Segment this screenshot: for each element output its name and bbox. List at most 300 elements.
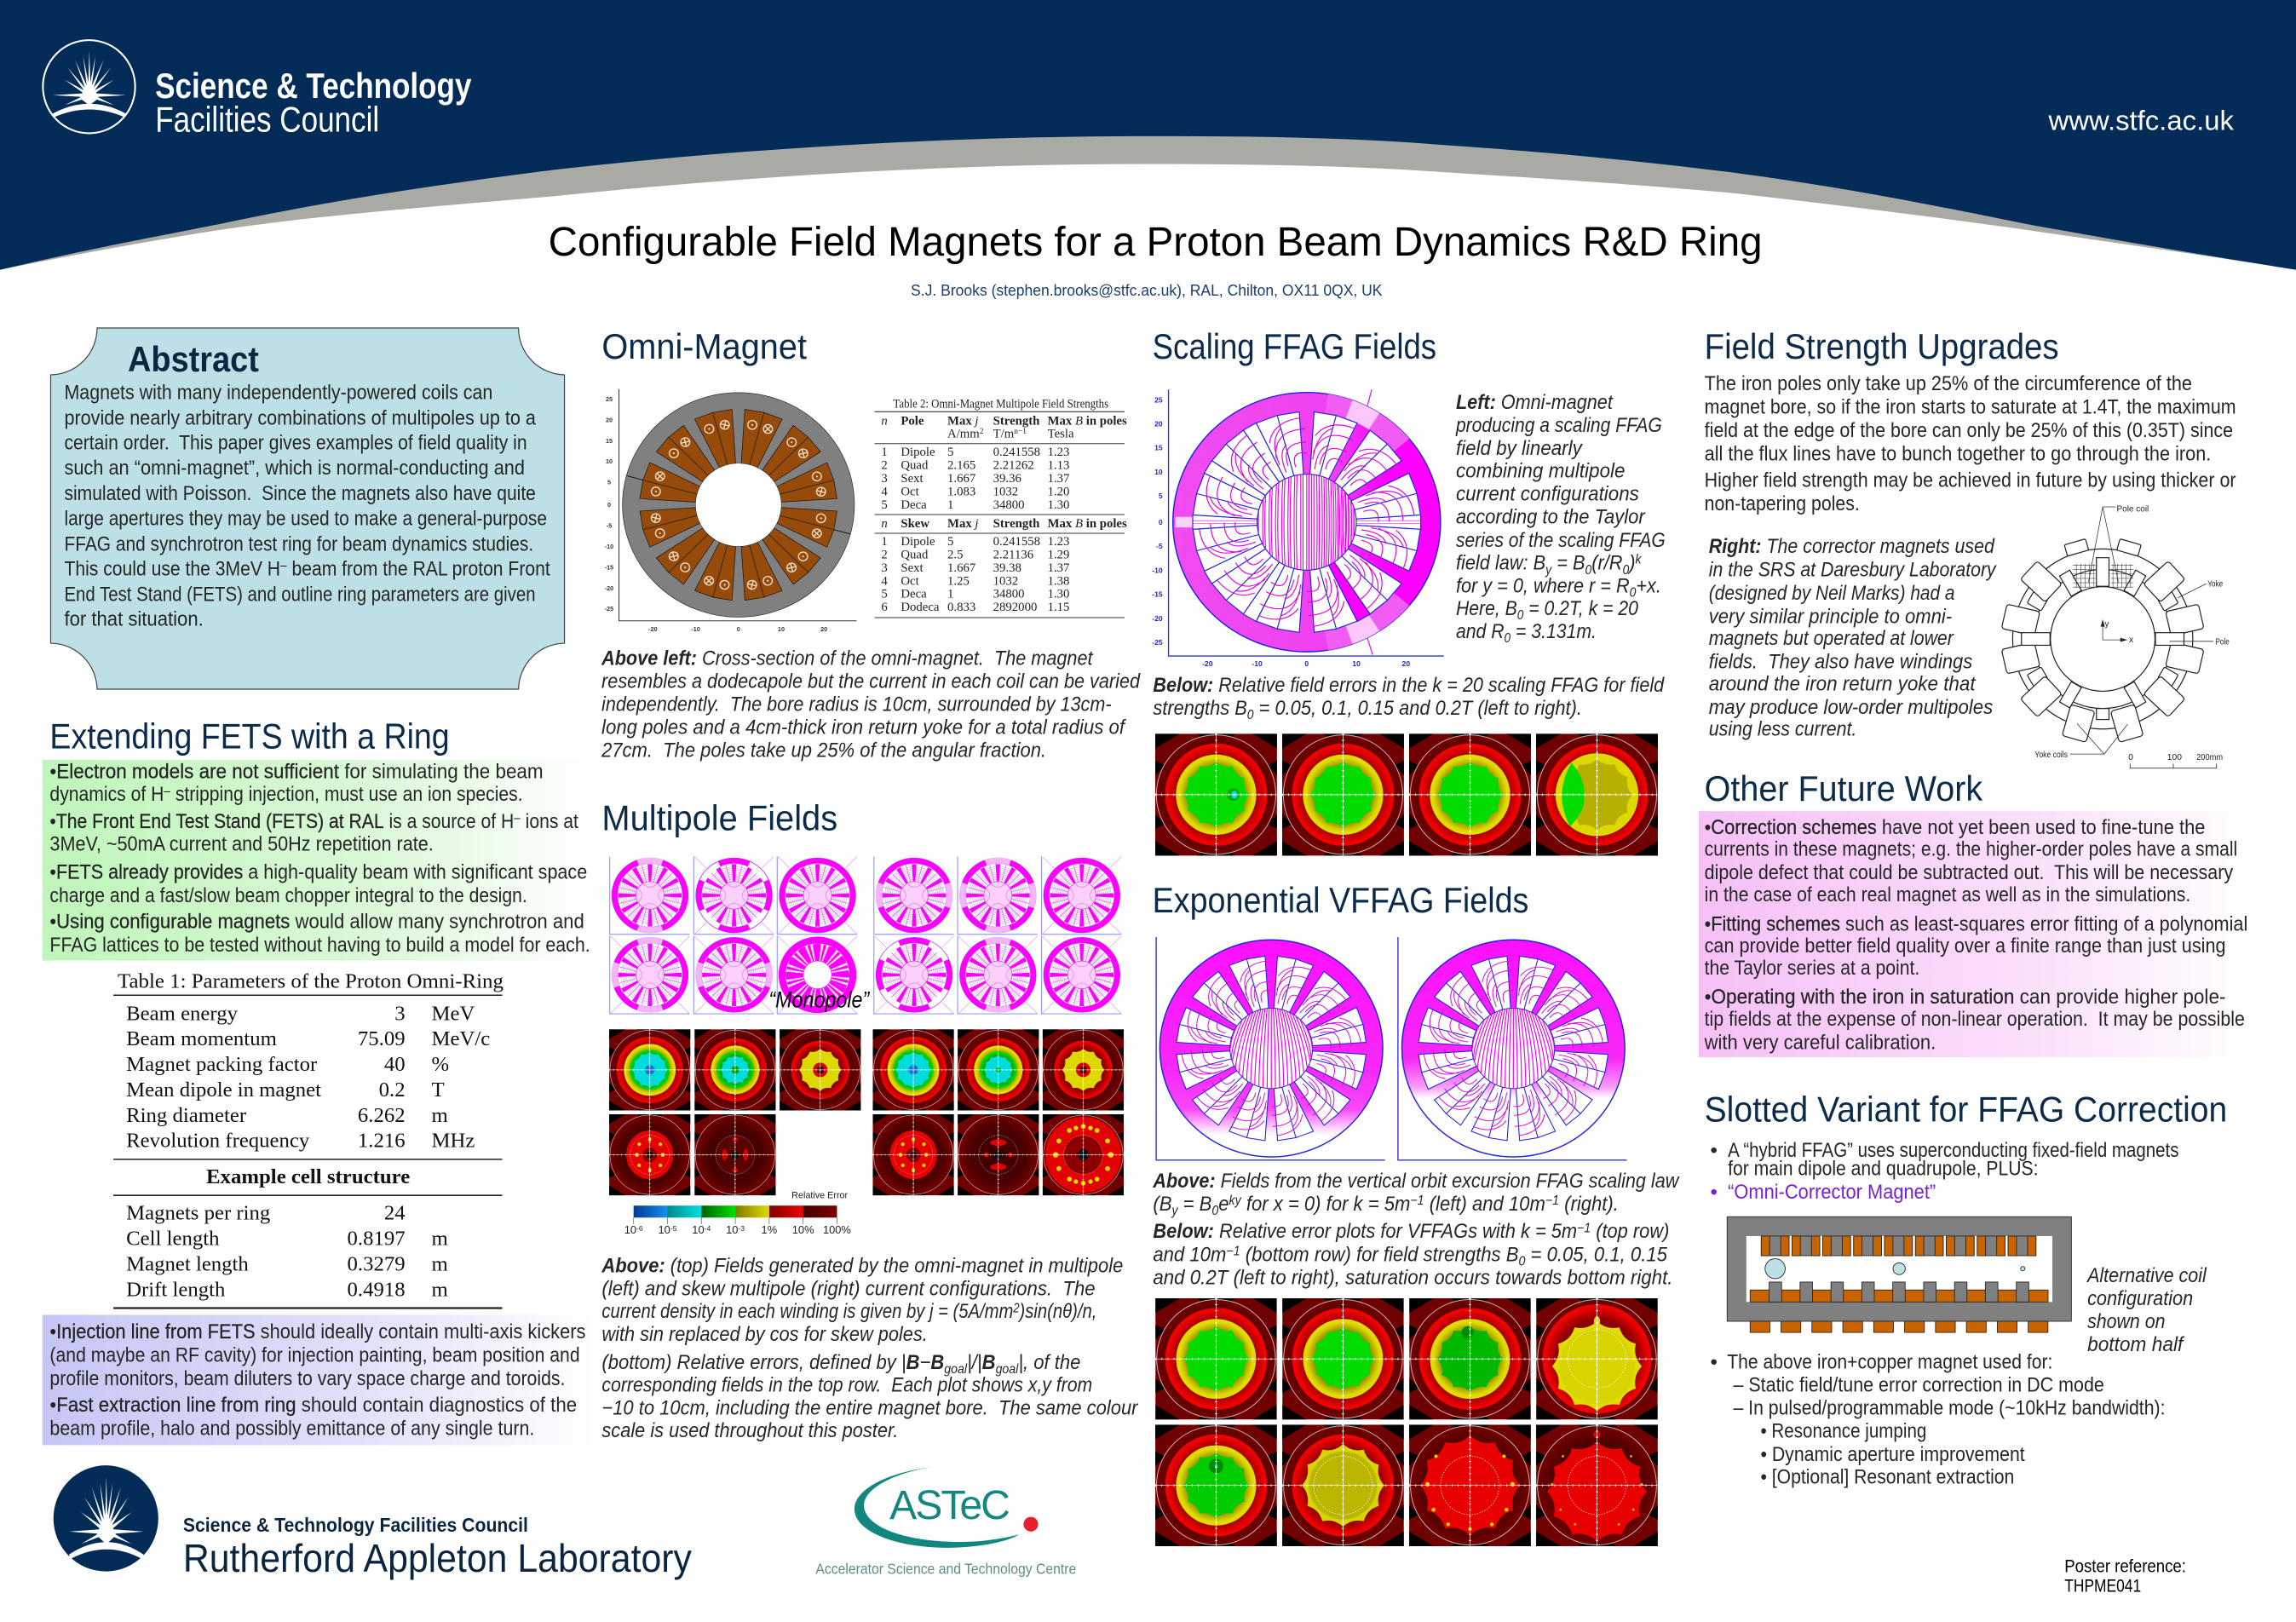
caption: right: in the SRS at Daresbury Laboratory: [1709, 558, 1997, 581]
table 2: multipole field strengths: 39.38: [993, 561, 1021, 575]
caption: left: combining multipole: [1456, 460, 1625, 483]
pink callout: can provide better field quality over a finite range than just using: [1705, 935, 2225, 958]
website url: www.stfc.ac.uk: [2048, 105, 2235, 136]
table 1: ring parameters: Table 1: Parameters of the Proton Omni-Ring: [118, 969, 504, 992]
caption: left: according to the Taylor: [1456, 506, 1646, 529]
table 2: multipole field strengths: [875, 398, 1127, 618]
caption: left: ): [1627, 552, 1636, 575]
table 2: multipole field strengths: Strength: [993, 414, 1039, 428]
table 2: multipole field strengths: Deca: [901, 588, 927, 601]
legend: relative error colour scale: 10: [726, 1223, 738, 1236]
panel: scaling FFAG fields: [1152, 327, 1666, 855]
green callout: dynamics of H: [49, 783, 180, 806]
table 2: multipole field strengths: Deca: [901, 498, 927, 512]
caption: alternative coil: shown on: [2087, 1310, 2166, 1333]
table 2: multipole field strengths: Oct: [901, 574, 920, 588]
heading: abstract: Abstract: [128, 340, 259, 379]
table 2: multipole field strengths: Pole: [901, 414, 924, 428]
logo text: Science and Technology Facilities Council: Facilities Council: [155, 101, 379, 140]
body text: magnet bore, so if the iron starts to saturate at 1.4T, the maximum: [1705, 396, 2236, 419]
caption: VFFAG fields: (B: [1153, 1193, 1173, 1216]
caption: left: Here, B: [1456, 597, 1525, 620]
pink callout: in the case of each real magnet as well as in the simulations.: [1705, 883, 2190, 906]
pink callout: [1699, 811, 2252, 1057]
chart: scaling FFAG field map: 25: [1154, 395, 1163, 404]
table 2: multipole field strengths: 1.083: [947, 485, 975, 498]
caption: VFFAG fields: Below: Relative error plots for VFFAGs with k = 5m: [1153, 1220, 1614, 1243]
chart: VFFAG field map k=5: [1156, 937, 1385, 1160]
table 1: ring parameters: T: [432, 1078, 445, 1101]
table 2: multipole field strengths: 1: [947, 498, 953, 512]
caption: above left: long poles and a 4cm-thick iron return yoke for a total radius of: [601, 716, 1126, 739]
pink callout: with very careful calibration.: [1704, 1031, 1936, 1054]
table 2: multipole field strengths: 2.21262: [993, 458, 1034, 472]
blue callout: [43, 1314, 593, 1445]
caption: multipole fields: B: [982, 1351, 996, 1374]
chart: scaling FFAG field map: -15: [1152, 590, 1163, 599]
table 1: ring parameters: Beam momentum: [126, 1027, 277, 1050]
table 2: multipole field strengths: 2.5: [947, 549, 963, 562]
grey swoosh: [0, 136, 2296, 279]
caption: VFFAG fields: ky: [1229, 1193, 1242, 1208]
table 2: multipole field strengths: n−1: [1014, 428, 1027, 436]
table 2: multipole field strengths: 34800: [993, 498, 1025, 512]
table 1: ring parameters: 3: [394, 1003, 406, 1026]
table 1: ring parameters: Revolution frequency: [126, 1130, 310, 1153]
blue callout: (and maybe an RF cavity) for injection painting, beam position and: [49, 1343, 580, 1366]
abstract text: large apertures they may be used to make a general-purpose: [64, 508, 547, 531]
table 1: ring parameters: 0.2: [379, 1078, 406, 1101]
chart: scaling FFAG field map: -20: [1152, 614, 1163, 623]
panel: slotted variant for FFAG correction: [1705, 1090, 2227, 1489]
abstract text: FFAG and synchrotron test ring for beam dynamics studies.: [64, 532, 533, 555]
bullet list: uses: • Dynamic aperture improvement: [1760, 1443, 2025, 1466]
abstract text: This could use the 3MeV H: [64, 557, 310, 580]
panel: field strength upgrades: [1705, 327, 2236, 768]
logo: Rutherford Appleton Laboratory: Science & Technology Facilities Council: [183, 1514, 528, 1536]
caption: multipole fields: corresponding fields in the top row. Each plot shows x,y from: [601, 1374, 1092, 1397]
abstract text: for that situation.: [64, 608, 204, 631]
table 2: multipole field strengths: Quad: [901, 549, 929, 562]
legend: relative error colour scale: 1%: [762, 1223, 777, 1236]
label: monopole: “Monopole”: [768, 987, 870, 1013]
table 2: multipole field strengths: n: [881, 517, 888, 531]
caption: above left: [601, 647, 1141, 762]
chart: scaling FFAG field map: 10: [1154, 468, 1163, 476]
caption: right: may produce low-order multipoles: [1709, 696, 1993, 719]
chart: magnet cross-section: 5: [607, 479, 611, 486]
panel: other future work: [1699, 769, 2252, 1057]
caption: alternative coil: bottom half: [2087, 1333, 2184, 1356]
table 1: ring parameters: %: [432, 1053, 449, 1076]
caption: multipole fields: current density in each winding is given by j = (5A/mm: [601, 1300, 1028, 1323]
caption: left: y: [1545, 563, 1552, 578]
abstract text: certain order. This paper gives examples of field quality in: [64, 432, 527, 455]
logo: ASTeC: ASTeC: [889, 1482, 1010, 1528]
bullet list: uses: – In pulsed/programmable mode (~10kHz bandwidth):: [1733, 1397, 2166, 1420]
abstract text: such an “omni-magnet”, which is normal-conducting and: [64, 457, 525, 480]
caption: VFFAG fields: −1: [1226, 1245, 1240, 1259]
caption: multipole fields: [601, 1255, 1138, 1442]
abstract text: provide nearly arbitrary combinations of multipoles up to a: [64, 406, 536, 429]
poster reference: THPME041: [2064, 1575, 2141, 1596]
blue callout: beam profile, halo and possibly emittance of any single turn.: [49, 1417, 534, 1440]
chart: scaling FFAG field map: -10: [1252, 659, 1263, 668]
table 2: multipole field strengths: Dipole: [901, 446, 935, 459]
table 2: multipole field strengths: Skew: [901, 517, 929, 531]
bullet list: for main dipole and quadrupole, PLUS:: [1728, 1157, 2038, 1180]
caption: right: fields. They also have windings: [1709, 651, 1972, 674]
chart: magnet cross-section: 10: [778, 625, 785, 633]
caption: below: = 0.05, 0.1, 0.15 and 0.2T (left to right).: [1254, 697, 1582, 720]
caption: below: strengths B: [1153, 697, 1257, 720]
caption: VFFAG fields: −1: [1545, 1193, 1559, 1208]
table 1: ring parameters: 0.3279: [348, 1253, 406, 1276]
chart: magnet cross-section: 20: [606, 416, 613, 423]
caption: below: 0: [1247, 708, 1254, 722]
logo: ASTeC: [815, 1467, 1076, 1578]
caption: VFFAG fields: 0: [1211, 1204, 1219, 1218]
poster reference: [2064, 1556, 2186, 1596]
bullet list: uses: – Static field/tune error correction in DC mode: [1733, 1373, 2104, 1396]
chart: scaling FFAG field map: [1152, 389, 1444, 668]
table 1: ring parameters: MHz: [432, 1130, 475, 1153]
table 1: ring parameters: m: [432, 1253, 448, 1276]
chart: scaling FFAG field map: 0: [1159, 518, 1163, 526]
table 2: multipole field strengths: Quad: [901, 458, 929, 472]
table 2: multipole field strengths: 4: [881, 485, 888, 498]
legend: relative error colour scale: 10: [659, 1223, 670, 1236]
caption: VFFAG fields: −1: [1410, 1193, 1424, 1208]
chart: magnet cross-section: -20: [648, 625, 658, 633]
table 2: multipole field strengths: T/m: [993, 427, 1014, 440]
diagram: SRS corrector magnet: 100: [2167, 753, 2182, 762]
legend: relative error colour scale: -6: [636, 1224, 643, 1233]
diagram: SRS corrector magnet: x: [2129, 636, 2134, 645]
caption: VFFAG fields: for x = 0) for k = 5m: [1241, 1193, 1410, 1216]
body text: non-tapering poles.: [1705, 492, 1860, 515]
chart grid: multipole relative error maps: [609, 1029, 1124, 1195]
table 2: multipole field strengths: 3: [881, 561, 888, 575]
legend: relative error colour scale: Relative Error: [791, 1191, 848, 1201]
table 1: ring parameters: 75.09: [358, 1027, 406, 1050]
bullet list: uses: The above iron+copper magnet used for:: [1727, 1351, 2052, 1374]
abstract text: beam from the RAL proton Front: [287, 557, 550, 580]
table 2: multipole field strengths: 1.37: [1048, 561, 1069, 575]
caption: left: 0: [1505, 631, 1511, 646]
bullet list: uses: [1711, 1351, 2166, 1489]
green callout: •The Front End Test Stand (FETS) at RAL is a source of H: [49, 810, 532, 833]
heading: Multipole Fields: [601, 799, 837, 838]
table 1: ring parameters: 0.4918: [348, 1279, 406, 1302]
panel: omni-magnet: [601, 327, 1141, 762]
legend: relative error colour scale: 100%: [823, 1223, 851, 1236]
caption: VFFAG fields: [1152, 1170, 1680, 1289]
green callout: –: [164, 784, 170, 798]
caption: VFFAG fields: (top row): [1591, 1220, 1669, 1243]
caption: multipole fields: −10 to 10cm, including the entire magnet bore. The same colour: [601, 1396, 1138, 1419]
table 1: ring parameters: Cell length: [126, 1228, 220, 1251]
table 2: multipole field strengths: 1.38: [1048, 574, 1069, 588]
chart: scaling FFAG field map: 10: [1352, 659, 1361, 668]
green callout: •Using configurable magnets would allow many synchrotron and: [49, 911, 584, 934]
green callout: charge and a fast/slow beam chopper integral to the design.: [49, 884, 527, 907]
pink callout: tip fields at the expense of non-linear operation. It may be possible: [1705, 1008, 2245, 1031]
caption: right: (designed by Neil Marks) had a: [1709, 582, 1955, 605]
chart: magnet cross-section: 20: [820, 625, 827, 633]
table 2: multipole field strengths: 0.241558: [993, 535, 1040, 549]
diagram: SRS corrector magnet: Yoke: [2207, 580, 2223, 590]
pink callout: •Fitting schemes such as least-squares error fitting of a polynomial: [1705, 912, 2247, 935]
blue callout: •Injection line from FETS should ideally contain multi-axis kickers: [49, 1320, 586, 1343]
table 2: multipole field strengths: 1.667: [947, 561, 975, 575]
table 2: multipole field strengths: Sext: [901, 472, 924, 486]
caption: above left: Above left: Cross-section of the omni-magnet. The magnet: [601, 647, 1094, 670]
heading: Scaling FFAG Fields: [1153, 327, 1436, 366]
logo text: Science and Technology Facilities Council: Science & Technology: [155, 66, 471, 106]
green callout: ions at: [521, 810, 578, 833]
caption: multipole fields: goal: [996, 1362, 1019, 1377]
green callout: •FETS already provides a high-quality beam with significant space: [49, 860, 587, 883]
chart grid: VFFAG error maps: [1155, 1298, 1658, 1546]
caption: VFFAG fields: and 10m: [1153, 1244, 1233, 1267]
table 2: multipole field strengths: n: [881, 414, 888, 428]
legend: relative error colour scale: 10%: [792, 1223, 814, 1236]
table 2: multipole field strengths: Sext: [901, 561, 924, 575]
pink callout: the Taylor series at a point.: [1705, 957, 1919, 980]
chart: magnet cross-section: 10: [606, 457, 613, 465]
legend: relative error colour scale: [624, 1191, 851, 1236]
caption: multipole fields: goal: [944, 1362, 968, 1377]
abstract text: –: [280, 559, 287, 573]
caption: left: 0: [1585, 563, 1592, 578]
caption: left: Left: Omni-magnet: [1456, 391, 1614, 414]
table 2: multipole field strengths: 1.30: [1048, 588, 1069, 601]
table 2: multipole field strengths: 39.36: [993, 472, 1021, 486]
chart: VFFAG field map k=10: [1398, 937, 1627, 1160]
bullet list: uses: •: [1711, 1351, 1718, 1374]
caption: multipole fields: )sin(nθ)/n,: [1017, 1300, 1096, 1323]
caption: multipole fields: |, of the: [1018, 1351, 1080, 1374]
table 2: multipole field strengths: Strength: [993, 517, 1039, 531]
title: Configurable Field Magnets for a Proton Beam Dynamics R&D Ring: [549, 219, 1763, 265]
table 2: multipole field strengths: 2892000: [993, 601, 1037, 614]
legend: relative error colour scale: -3: [738, 1224, 745, 1233]
caption: multipole fields: (left) and skew multipole (right) current configurations. The: [601, 1277, 1096, 1300]
caption: right: [1709, 535, 1997, 741]
body text: field at the edge of the bore can only be 25% of this (0.35T) since: [1705, 419, 2233, 442]
white arch: [0, 164, 2296, 285]
logo: Rutherford Appleton Laboratory: Rutherford Appleton Laboratory: [183, 1536, 693, 1580]
caption: left: series of the scaling FFAG: [1456, 529, 1666, 552]
table 1: ring parameters: Beam energy: [126, 1003, 239, 1026]
body text: Higher field strength may be achieved in future by using thicker or: [1705, 469, 2236, 492]
chart: scaling FFAG field map: -20: [1202, 659, 1213, 668]
table 2: multipole field strengths: 1.30: [1048, 498, 1069, 512]
table 2: multipole field strengths: 3: [881, 472, 888, 486]
table 2: multipole field strengths: A/mm: [947, 427, 980, 440]
table 2: multipole field strengths: 4: [881, 574, 888, 588]
green callout: –: [514, 811, 521, 825]
bullet list: uses: • Resonance jumping: [1760, 1420, 1926, 1443]
table 2: multipole field strengths: 0.833: [947, 601, 975, 614]
table 2: multipole field strengths: 2: [881, 549, 888, 562]
caption: VFFAG fields: (left) and 10m: [1424, 1193, 1545, 1216]
legend: relative error colour scale: -4: [705, 1224, 711, 1233]
caption: left: 0: [1517, 608, 1524, 623]
diagram: SRS corrector magnet: y: [2104, 620, 2109, 630]
caption: right: Right: The corrector magnets used: [1709, 535, 1994, 558]
caption: above left: independently. The bore radius is 10cm, surrounded by 13cm-: [601, 693, 1112, 716]
caption: left: field by linearly: [1456, 437, 1584, 460]
table 2: multipole field strengths: 5: [947, 446, 953, 459]
caption: left: and R: [1456, 620, 1511, 643]
chart: scaling FFAG field map: 5: [1159, 492, 1163, 500]
green callout: [43, 760, 593, 961]
table 2: multipole field strengths: 5: [881, 498, 888, 512]
heading: Extending FETS with a Ring: [49, 716, 450, 756]
caption: left: current configurations: [1456, 482, 1639, 505]
chart: scaling FFAG field map: 20: [1402, 659, 1410, 668]
caption: above left: 27cm. The poles take up 25% of the angular fraction.: [601, 739, 1046, 762]
caption: below: [1153, 674, 1665, 722]
table 2: multipole field strengths: 1.37: [1048, 472, 1069, 486]
caption: VFFAG fields: y: [1171, 1204, 1179, 1218]
caption: right: very similar principle to omni-: [1709, 605, 1952, 628]
table 2: multipole field strengths: 2.165: [947, 458, 975, 472]
pink callout: currents in these magnets; e.g. the higher-order poles have a small: [1705, 838, 2237, 861]
table 1: ring parameters: Magnets per ring: [126, 1202, 270, 1225]
caption: left: k: [1636, 553, 1643, 567]
green callout: stripping injection, must use an ion species.: [170, 783, 523, 806]
caption: right: around the iron return yoke that: [1709, 672, 1977, 695]
diagram: SRS corrector magnet: [2001, 505, 2230, 768]
caption: alternative coil: Alternative coil: [2086, 1264, 2207, 1287]
table 2: multipole field strengths: Max j: [947, 517, 979, 531]
caption: VFFAG fields: = 0.05, 0.1, 0.15: [1525, 1244, 1668, 1267]
panel: extending FETS with a ring: [43, 716, 593, 1445]
logo: Rutherford Appleton Laboratory: [54, 1465, 693, 1580]
diagram: SRS corrector magnet: Yoke coils: [2034, 751, 2068, 760]
caption: above left: resembles a dodecapole but the current in each coil can be varied: [601, 670, 1141, 693]
abstract text: Magnets with many independently-powered coils can: [64, 381, 492, 404]
caption: left: 0: [1623, 563, 1630, 578]
chart: magnet cross-section: -25: [605, 605, 613, 613]
table 2: multipole field strengths: 1.25: [947, 574, 970, 588]
table 1: ring parameters: 1.216: [358, 1130, 406, 1153]
table 2: multipole field strengths: Max B in poles: [1048, 517, 1127, 531]
header banner: [0, 0, 2296, 285]
body text: The iron poles only take up 25% of the circumference of the: [1705, 372, 2192, 395]
caption: alternative coil: [2086, 1264, 2207, 1356]
table 2: multipole field strengths: 1: [881, 535, 888, 549]
table 2: multipole field strengths: Max B in poles: [1048, 414, 1127, 428]
author line: S.J. Brooks (stephen.brooks@stfc.ac.uk), RAL, Chilton, OX11 0QX, UK: [911, 282, 1383, 300]
chart: scaling FFAG field map: -25: [1152, 638, 1163, 647]
chart: magnet cross-section: 25: [606, 395, 613, 403]
table 1: ring parameters: 40: [384, 1053, 406, 1076]
table 1: ring parameters: Magnet packing factor: [126, 1053, 318, 1076]
caption: VFFAG fields: (right).: [1559, 1193, 1619, 1216]
caption: left: +x.: [1636, 574, 1661, 597]
bullet list: “Omni-Corrector Magnet”: [1728, 1181, 1936, 1204]
table 1: ring parameters: Magnet length: [126, 1253, 249, 1276]
caption: left: 0: [1630, 586, 1637, 601]
chart grid: multipole field line plots: [610, 856, 1121, 1014]
legend: relative error colour scale: 10: [624, 1223, 636, 1236]
table 1: ring parameters: MeV/c: [432, 1027, 490, 1050]
table 2: multipole field strengths: 1.23: [1048, 535, 1069, 549]
table 1: ring parameters: 6.262: [358, 1104, 406, 1127]
caption: multipole fields: 2: [1012, 1301, 1020, 1315]
table 2: multipole field strengths: 2: [881, 458, 888, 472]
heading: Slotted Variant for FFAG Correction: [1705, 1090, 2227, 1130]
table 2: multipole field strengths: 1.29: [1048, 549, 1069, 562]
chart: magnet cross-section: -20: [605, 584, 613, 592]
caption: left: = B: [1551, 552, 1585, 575]
panel: abstract: [50, 328, 565, 689]
legend: relative error colour scale: -5: [670, 1224, 677, 1233]
table 2: multipole field strengths: 2: [980, 428, 984, 436]
heading: Other Future Work: [1705, 769, 1983, 808]
table 2: multipole field strengths: Tesla: [1048, 427, 1074, 440]
pink callout: dipole defect that could be subtracted out. This will be necessary: [1705, 861, 2233, 884]
green callout: 3MeV, ~50mA current and 50Hz repetition rate.: [49, 833, 434, 856]
table 1: ring parameters: Mean dipole in magnet: [126, 1078, 321, 1101]
bullet list: A “hybrid FFAG” uses superconducting fixed-field magnets: [1728, 1139, 2179, 1162]
table 2: multipole field strengths: 0.241558: [993, 446, 1040, 459]
table 1: ring parameters: m: [432, 1228, 448, 1251]
table 2: multipole field strengths: 2.21136: [993, 549, 1033, 562]
body text: [1705, 372, 2236, 515]
abstract text: End Test Stand (FETS) and outline ring parameters are given: [64, 583, 536, 606]
diagram: omni-corrector magnet: [1727, 1216, 2071, 1332]
bullet list: [1711, 1139, 2179, 1204]
panel: exponential VFFAG fields: [1152, 881, 1680, 1546]
caption: VFFAG fields: 0: [1518, 1255, 1526, 1269]
body text: all the flux lines have to bunch together to go through the iron.: [1705, 443, 2211, 466]
caption: left: = 3.131m.: [1511, 620, 1597, 643]
caption: VFFAG fields: = B: [1178, 1193, 1211, 1216]
table 1: ring parameters: MeV: [432, 1003, 475, 1026]
table 2: multipole field strengths: Dodeca: [901, 601, 940, 614]
table 2: multipole field strengths: 1.13: [1048, 458, 1069, 472]
pink callout: •Operating with the iron in saturation can provide higher pole-: [1705, 986, 2225, 1009]
poster reference: Poster reference:: [2064, 1556, 2186, 1577]
table 1: ring parameters: Ring diameter: [126, 1104, 247, 1127]
table 2: multipole field strengths: 1: [947, 588, 953, 601]
table 2: multipole field strengths: 1.20: [1048, 485, 1069, 498]
table 2: multipole field strengths: 1.23: [1048, 446, 1069, 459]
chart row: scaling FFAG error maps: [1155, 733, 1658, 855]
abstract text: [64, 381, 550, 631]
caption: below: Below: Relative field errors in the k = 20 scaling FFAG for field: [1153, 674, 1665, 697]
table 2: multipole field strengths: 1032: [993, 574, 1018, 588]
bullet list: •: [1711, 1181, 1718, 1204]
panel: multipole fields: [601, 799, 1138, 1442]
caption: alternative coil: configuration: [2087, 1287, 2193, 1310]
legend: relative error colour scale: 10: [692, 1223, 705, 1236]
pink callout: •Correction schemes have not yet been used to fine-tune the: [1705, 816, 2205, 839]
table 2: multipole field strengths: 1.15: [1048, 601, 1069, 614]
caption: multipole fields: Above: (top) Fields generated by the omni-magnet in multipole: [601, 1255, 1123, 1278]
table 2: multipole field strengths: Oct: [901, 485, 920, 498]
abstract text: simulated with Poisson. Since the magnets also have quite: [64, 482, 536, 505]
table 2: multipole field strengths: 5: [947, 535, 953, 549]
table 2: multipole field strengths: Dipole: [901, 535, 935, 549]
green callout: FFAG lattices to be tested without having to build a model for each.: [49, 934, 590, 957]
table 1: ring parameters: m: [432, 1279, 448, 1302]
